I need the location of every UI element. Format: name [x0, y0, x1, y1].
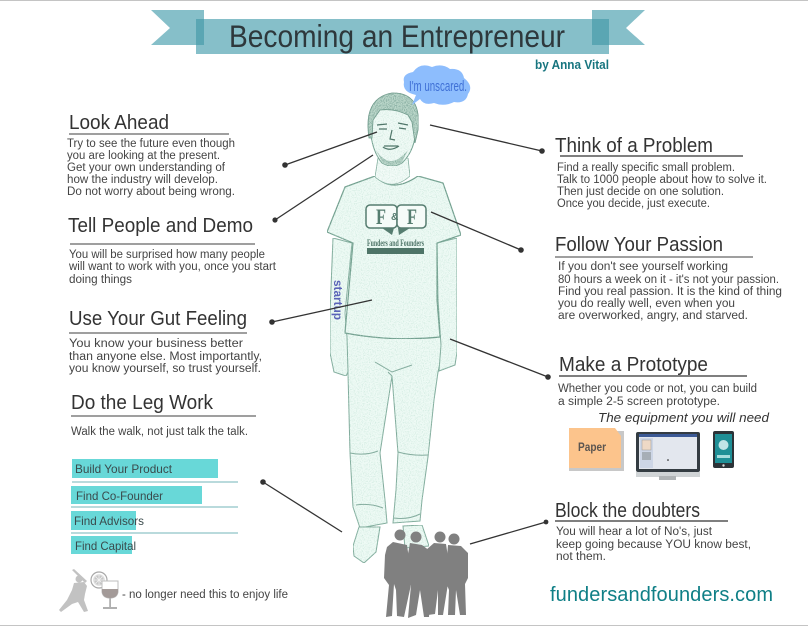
icon: paper — [569, 428, 624, 471]
icon: citrus slice — [91, 572, 107, 588]
icon: baseball player — [59, 569, 88, 612]
section: follow your passion: are overworked, angry, and starved. — [558, 310, 748, 322]
cloud text: I'm unscared. — [409, 79, 467, 95]
legs and trousers — [345, 330, 443, 528]
shirt logo: F — [376, 204, 386, 229]
task bars: Find Co-Founder — [76, 489, 163, 503]
section: block the doubters — [555, 500, 751, 563]
section: follow your passion: Find you real passion. It is the kind of thing — [558, 286, 782, 298]
section: think of a problem — [555, 135, 767, 210]
person illustration — [327, 93, 461, 563]
section: think of a problem: Think of a Problem — [555, 135, 713, 157]
section: think of a problem: Then just decide on one solution. — [557, 186, 724, 198]
silhouettes of doubters — [384, 530, 468, 618]
section: use your gut feeling: Use Your Gut Feeling — [69, 308, 247, 330]
section: do the leg work — [71, 392, 256, 438]
shirt logo: Funders and Founders — [367, 238, 424, 248]
icon: paper: Paper — [578, 442, 606, 454]
arms and hands — [330, 238, 457, 376]
section: use your gut feeling: than anyone else. Most importantly, — [69, 351, 262, 363]
section: look ahead: Do not worry about being wrong. — [67, 186, 235, 198]
section: do the leg work: Do the Leg Work — [71, 392, 214, 414]
section: tell people and demo — [68, 215, 277, 286]
icon: computer monitor — [636, 432, 700, 480]
connector: prototype — [450, 339, 551, 380]
connector: tell people — [272, 155, 373, 223]
shirt logo — [366, 204, 426, 254]
title: Becoming an Entrepreneur — [229, 18, 565, 54]
caption: no longer need this: - no longer need this to enjoy life — [122, 589, 288, 601]
section: follow your passion: 80 hours a week on it - it's not your passion. — [558, 274, 779, 286]
t-shirt — [327, 176, 461, 339]
section: make a prototype: a simple 2-5 screen prototype. — [558, 396, 720, 408]
task bars — [71, 459, 238, 554]
section: make a prototype — [558, 354, 757, 408]
section: block the doubters: not them. — [556, 551, 606, 563]
thought cloud — [404, 65, 470, 105]
section: follow your passion: If you don't see yourself working — [558, 261, 728, 273]
arm label: startup: startup — [331, 280, 343, 320]
section: tell people and demo: doing things — [69, 274, 132, 286]
section: follow your passion: you do really well, even when you — [558, 298, 735, 310]
section: think of a problem: Talk to 1000 people about how to solve it. — [557, 174, 767, 186]
trouser creases — [350, 362, 428, 518]
section: look ahead: how the industry will develop. — [67, 174, 218, 186]
connector: follow your passion — [431, 212, 524, 253]
beard shadow — [376, 150, 408, 166]
icon: wine glass — [102, 581, 118, 609]
section: tell people and demo: You will be surprised how many people — [69, 249, 265, 261]
connector: think of a problem — [430, 125, 545, 154]
connector: leg work — [260, 479, 342, 532]
icon: phone — [713, 431, 734, 468]
shoes — [353, 525, 429, 563]
task bars: Find Advisors — [74, 514, 144, 528]
section: use your gut feeling: you know yourself, so trust yourself. — [69, 363, 261, 375]
section: block the doubters: You will hear a lot of No's, just — [556, 526, 713, 538]
connector: gut feeling — [269, 300, 372, 325]
section: follow your passion — [555, 234, 782, 322]
section: look ahead: you are looking at the present. — [67, 150, 220, 162]
hair — [368, 93, 418, 143]
section: look ahead — [67, 112, 235, 198]
section: use your gut feeling — [69, 308, 262, 375]
section: tell people and demo: Tell People and Demo — [68, 215, 253, 237]
section: do the leg work: Walk the walk, not just talk the talk. — [71, 426, 248, 438]
face features — [377, 123, 408, 149]
section: use your gut feeling: You know your business better — [69, 338, 243, 350]
task bars: Find Capital — [75, 539, 136, 553]
shirt logo: & — [391, 212, 398, 223]
title banner — [151, 10, 645, 54]
section: tell people and demo: will want to work with you, once you start — [68, 261, 277, 273]
head — [370, 98, 416, 166]
section: look ahead: Get your own understanding of — [67, 162, 226, 174]
neck — [375, 158, 410, 184]
section: make a prototype: Whether you code or not, you can build — [558, 383, 757, 395]
equipment heading: The equipment you will need — [598, 410, 770, 425]
byline: by Anna Vital — [535, 58, 609, 72]
connector: doubters — [470, 520, 548, 544]
section: look ahead: Look Ahead — [69, 112, 169, 134]
section: look ahead: Try to see the future even though — [67, 138, 235, 150]
section: follow your passion: Follow Your Passion — [555, 234, 723, 256]
task bars: Build Your Product — [75, 462, 173, 476]
section: block the doubters: keep going because YOU know best, — [556, 539, 751, 551]
section: think of a problem: Find a really specific small problem. — [557, 162, 735, 174]
connector: look ahead — [282, 132, 377, 168]
section: make a prototype: Make a Prototype — [559, 354, 708, 376]
section: think of a problem: Once you decide, just execute. — [557, 198, 710, 210]
shirt logo: F — [407, 204, 417, 229]
website link: fundersandfounders.com — [550, 584, 773, 606]
section: block the doubters: Block the doubters — [555, 500, 700, 522]
